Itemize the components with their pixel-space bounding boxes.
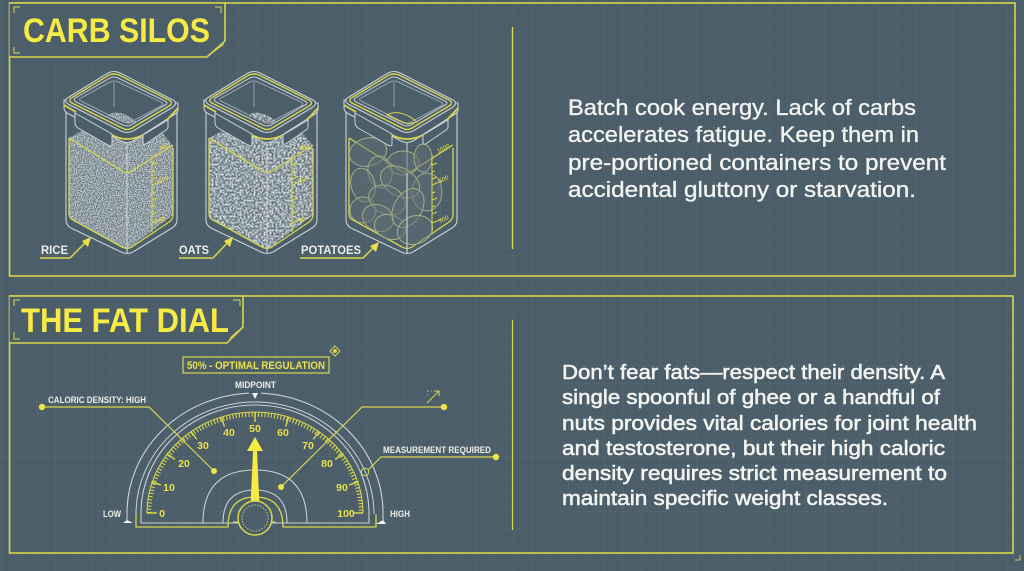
label: rice: RICE: [41, 243, 68, 257]
label: midpoint: MIDPOINT: [235, 380, 276, 391]
label: low: LOW: [103, 509, 121, 520]
container: oats: [204, 72, 318, 254]
text block: carb silos description: accidental gluttony or starvation.: [568, 177, 916, 202]
scale numbers: 30: [197, 440, 209, 452]
scale numbers: 50: [249, 423, 261, 435]
container: rice: 50: [158, 216, 167, 225]
scale numbers: 40: [223, 427, 235, 439]
label: potatoes: POTATOES: [301, 243, 361, 257]
container: rice: 200: [158, 175, 171, 185]
heading: the fat dial: THE FAT DIAL: [21, 302, 229, 340]
needle: [247, 437, 263, 505]
badge: optimal regulation: [183, 357, 329, 373]
text block: carb silos description: Batch cook energy. Lack of carbs: [568, 95, 916, 120]
container: oats: 400: [298, 143, 311, 153]
container: oats: 50: [298, 216, 307, 225]
knob: [233, 501, 276, 535]
container: potatoes: [344, 72, 458, 254]
scale numbers: 20: [178, 458, 190, 470]
label: high: HIGH: [390, 509, 410, 520]
scale numbers: 90: [336, 482, 348, 494]
panel: the fat dial: [10, 296, 1020, 560]
callout: pointer line: [278, 404, 447, 490]
text block: carb silos description: [568, 95, 946, 202]
scale numbers: 80: [321, 458, 333, 470]
scale numbers: 0: [159, 508, 165, 520]
heading: carb silos: [10, 3, 225, 57]
panel: carb silos: [10, 3, 1015, 276]
text block: fat dial description: Don’t fear fats—respect their density. A: [562, 361, 945, 384]
callout: caloric density: [39, 395, 217, 474]
outer arcs: [123, 393, 386, 527]
icon: caliper: [427, 391, 439, 403]
badge: optimal regulation: 50% - OPTIMAL REGULATION: [187, 360, 325, 372]
text block: fat dial description: maintain specific weight classes.: [562, 487, 888, 510]
divider: [512, 320, 514, 530]
text block: fat dial description: and testosterone, but their high caloric: [562, 437, 945, 460]
label: oats: [179, 237, 233, 258]
text block: carb silos description: accelerates fatigue. Keep them in: [568, 122, 919, 147]
callout: caloric density: CALORIC DENSITY: HIGH: [48, 395, 146, 406]
text block: fat dial description: density requires strict measurement to: [562, 462, 947, 485]
container: potatoes: 500: [438, 175, 451, 185]
scale numbers: 70: [302, 440, 314, 452]
container: potatoes: 1000: [436, 143, 452, 155]
scale numbers: 100: [337, 508, 355, 520]
container: potatoes: 100: [438, 215, 451, 225]
panel frame: [10, 296, 1013, 553]
panel frame: [10, 3, 1015, 276]
scale numbers: [159, 423, 355, 520]
text block: fat dial description: [562, 361, 977, 510]
midpoint marker: [252, 393, 258, 399]
gauge: [123, 393, 386, 535]
text block: carb silos description: pre-portioned containers to prevent: [568, 150, 946, 175]
container: oats: 200: [298, 175, 311, 185]
callout: measurement required: MEASUREMENT REQUIRED: [383, 445, 491, 456]
corner mark: [1015, 555, 1020, 560]
text block: fat dial description: nuts provides vital calories for joint health: [562, 412, 977, 435]
heading: carb silos: CARB SILOS: [23, 12, 210, 50]
label: oats: OATS: [179, 243, 209, 257]
scale ticks: [147, 412, 363, 513]
scale numbers: 60: [277, 427, 289, 439]
icon: target: [330, 346, 340, 356]
container: rice: 400: [158, 143, 171, 153]
callout: measurement required: [361, 445, 499, 476]
label: rice: [40, 237, 91, 258]
text block: fat dial description: single spoonful of ghee or a handful of: [562, 386, 940, 409]
divider: [512, 27, 514, 249]
scale numbers: 10: [163, 482, 175, 494]
container: rice: [64, 72, 178, 254]
